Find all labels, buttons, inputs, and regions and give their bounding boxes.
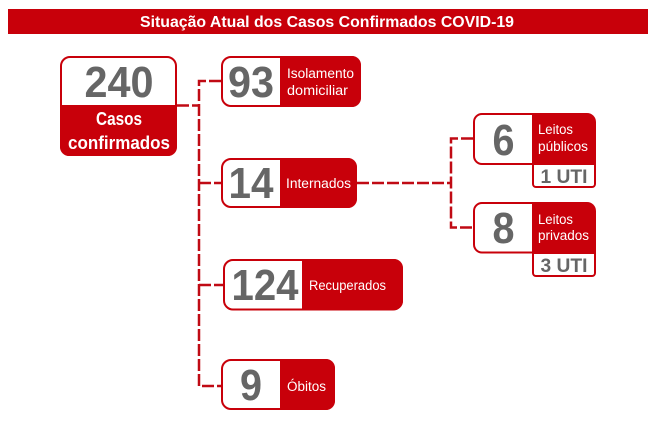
card: 8 leitos privados: 8	[492, 204, 514, 253]
card: 8 leitos privados	[474, 202, 596, 277]
card: 6 leitos publicos: públicos	[538, 139, 588, 154]
card: 240 casos confirmados: confirmados	[68, 132, 170, 153]
card: 124 recuperados	[224, 259, 403, 310]
card: 93 isolamento domiciliar: Isolamento	[287, 66, 354, 81]
card: 8 leitos privados: 3 UTI	[540, 255, 588, 277]
title banner	[8, 9, 648, 34]
card: 6 leitos publicos: 6	[492, 116, 514, 165]
card: 93 isolamento domiciliar: domiciliar	[287, 83, 349, 98]
card: 240 casos confirmados: Casos	[96, 108, 142, 129]
card: 6 leitos publicos: Leitos	[538, 122, 573, 137]
card: 9 obitos: Óbitos	[287, 379, 326, 394]
card: 240 casos confirmados: 240	[84, 58, 154, 107]
card: 9 obitos	[222, 359, 335, 410]
card: 14 internados: Internados	[286, 176, 351, 191]
card: 9 obitos: 9	[240, 361, 262, 410]
card: 240 casos confirmados	[60, 57, 177, 156]
card: 93 isolamento domiciliar: 93	[228, 58, 274, 107]
card: 14 internados: 14	[228, 159, 274, 208]
card: 6 leitos publicos: 1 UTI	[540, 166, 588, 188]
card: 14 internados	[222, 158, 357, 208]
card: 124 recuperados: 124	[232, 261, 299, 310]
card: 6 leitos publicos	[474, 113, 596, 188]
card: 8 leitos privados: Leitos	[538, 212, 573, 227]
card: 124 recuperados: Recuperados	[309, 278, 386, 293]
card: 8 leitos privados: privados	[538, 228, 589, 243]
title banner: Situação Atual dos Casos Confirmados COVID-19	[140, 14, 514, 31]
card: 93 isolamento domiciliar	[222, 56, 361, 107]
connector: total to categories	[177, 81, 223, 386]
connector: internados to beds	[357, 138, 473, 228]
